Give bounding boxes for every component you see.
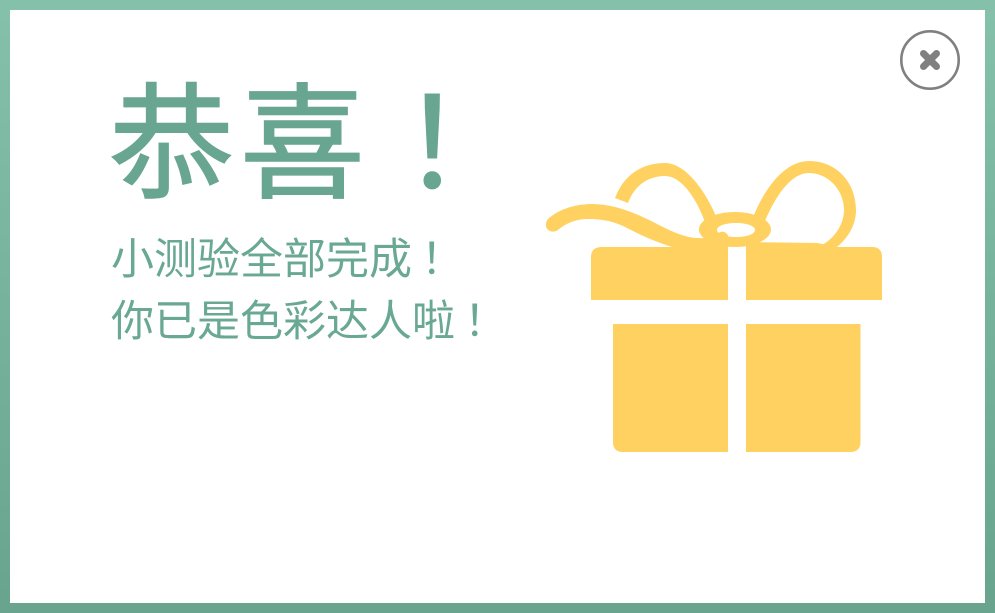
ribbon knot centre xyxy=(710,232,729,247)
title: 恭喜！ xyxy=(109,43,532,224)
gift lid left xyxy=(591,247,728,300)
ribbon right loop xyxy=(754,161,856,247)
gift base left xyxy=(613,324,728,452)
message line 1: 小测验全部完成！ xyxy=(111,225,464,287)
icon: gift box xyxy=(546,161,882,452)
ribbon tail xyxy=(546,204,728,247)
ribbon left loop xyxy=(615,163,716,222)
message line 2: 你已是色彩达人啦！ xyxy=(111,287,507,349)
message text xyxy=(111,225,507,349)
gift base right xyxy=(746,324,860,452)
ribbon knot xyxy=(699,212,771,247)
gift lid right xyxy=(746,242,882,300)
icon: close button xyxy=(900,30,960,90)
